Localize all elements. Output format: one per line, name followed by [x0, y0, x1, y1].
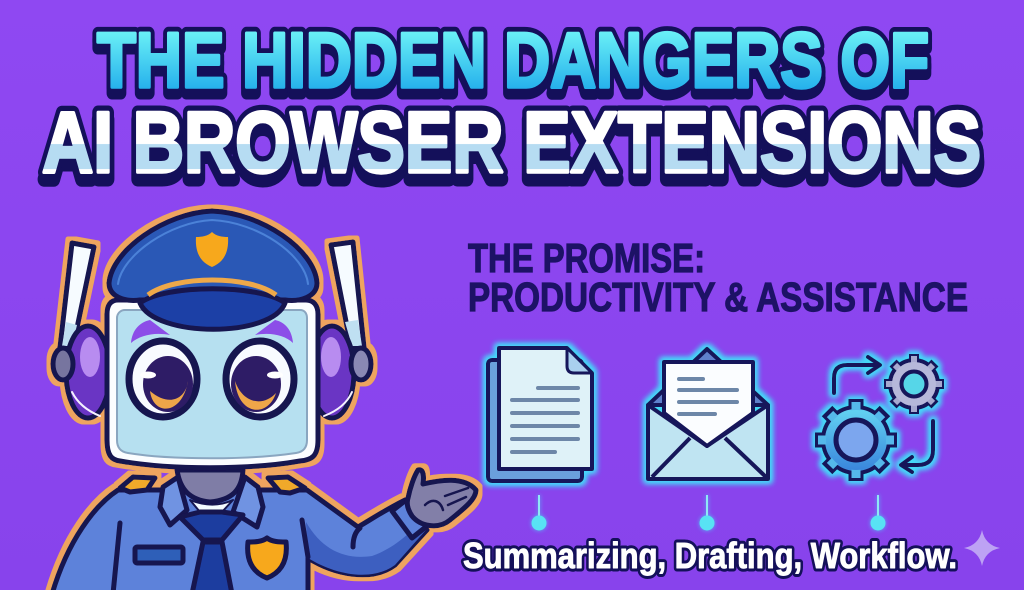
- text lines: [512, 388, 578, 452]
- chest badge: [248, 538, 286, 578]
- right eye: [226, 341, 294, 417]
- right epaulet: [268, 477, 305, 493]
- connector: drafting: [700, 495, 714, 530]
- small gear: [884, 354, 944, 414]
- cap band: [148, 280, 276, 295]
- bottom arrow: [901, 421, 933, 472]
- title: [42, 16, 981, 198]
- police cap: [109, 211, 317, 329]
- neck: [177, 470, 243, 502]
- left epaulet: [120, 477, 155, 492]
- envelope body: [648, 405, 768, 479]
- caption: Summarizing, Drafting, Workflow.: [463, 535, 957, 576]
- icon: envelope: [648, 349, 768, 479]
- left ear: [53, 326, 110, 418]
- heading line 1: THE PROMISE:: [468, 235, 705, 281]
- hand: [407, 470, 476, 526]
- icon: workflow gears: [815, 354, 944, 481]
- top arrow: [834, 357, 880, 393]
- back flap: [648, 349, 768, 405]
- icon: sparkle watermark: [964, 530, 1000, 566]
- uniform torso and arm: [52, 490, 427, 590]
- front page: [499, 348, 592, 469]
- screen: [117, 310, 307, 458]
- left eye: [129, 341, 197, 417]
- connector: workflow: [870, 495, 886, 530]
- connector: summarizing: [532, 495, 546, 530]
- shirt: [190, 500, 233, 512]
- fold lines: [652, 438, 766, 477]
- back page: [488, 360, 582, 481]
- cap badge: [196, 232, 228, 267]
- page fold: [567, 348, 592, 373]
- caption: Summarizing, Drafting, Workflow.: [463, 535, 957, 576]
- right antenna: [331, 242, 364, 347]
- sleeve shading: [306, 522, 426, 575]
- left collar: [160, 477, 187, 525]
- large gear: [815, 399, 897, 481]
- right ear: [310, 326, 371, 418]
- letter: [664, 362, 753, 446]
- tie: [180, 512, 243, 590]
- cap visor: [140, 289, 285, 329]
- left antenna: [60, 243, 94, 347]
- chest pocket: [135, 547, 183, 563]
- head frame: [107, 300, 318, 468]
- heading: the promise: [468, 235, 968, 320]
- letter lines: [679, 379, 737, 414]
- right eyebrow: [255, 320, 293, 343]
- left eyebrow: [131, 320, 170, 343]
- icon: document: [488, 348, 592, 481]
- sleeve creases: [113, 520, 360, 590]
- cuff: [392, 500, 427, 538]
- robot police officer character: [52, 211, 476, 590]
- right collar: [233, 477, 263, 527]
- hand finger lines: [425, 488, 468, 510]
